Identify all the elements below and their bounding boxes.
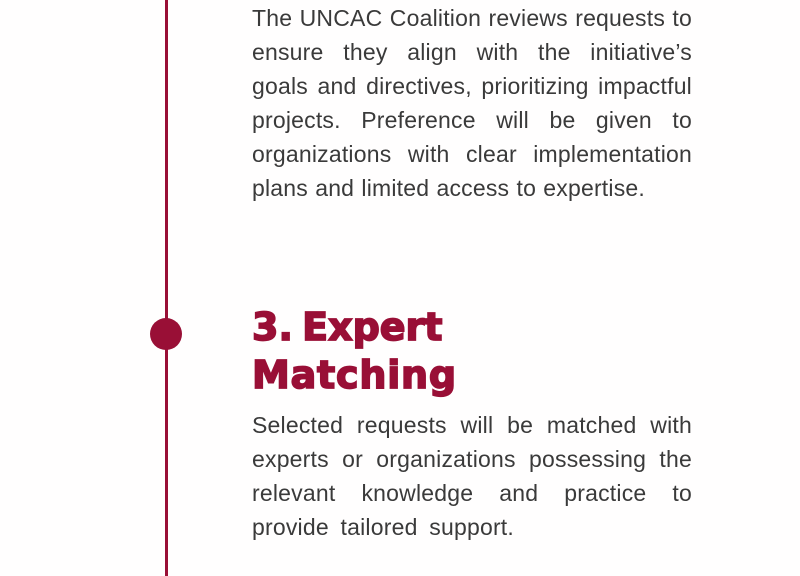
text block: step 3 expert matching description: relevant knowledge and practice to: [252, 480, 692, 506]
timeline marker: step 3: [150, 318, 182, 350]
text block: step 3 expert matching description: [252, 412, 692, 540]
timeline line: [165, 0, 168, 576]
text block: step 2 review description: ensure they align with the initiative’s: [252, 39, 692, 65]
text block: step 2 review description: The UNCAC Coalition reviews requests to: [252, 5, 692, 31]
text block: step 2 review description: organizations with clear implementation: [252, 141, 692, 167]
heading: 3. Expert Matching: Matching: [252, 353, 457, 397]
text block: step 3 expert matching description: provide tailored support.: [252, 514, 514, 540]
text block: step 3 expert matching description: Selected requests will be matched with: [252, 412, 692, 438]
text block: step 2 review description: goals and directives, prioritizing impactful: [252, 73, 692, 99]
heading: 3. Expert Matching: 3. Expert: [252, 305, 442, 349]
heading: 3. Expert Matching: [252, 305, 457, 398]
text block: step 2 review description: [252, 5, 692, 201]
text block: step 2 review description: plans and limited access to expertise.: [252, 175, 645, 201]
text block: step 3 expert matching description: experts or organizations possessing the: [252, 446, 692, 472]
text block: step 2 review description: projects. Preference will be given to: [252, 107, 692, 133]
